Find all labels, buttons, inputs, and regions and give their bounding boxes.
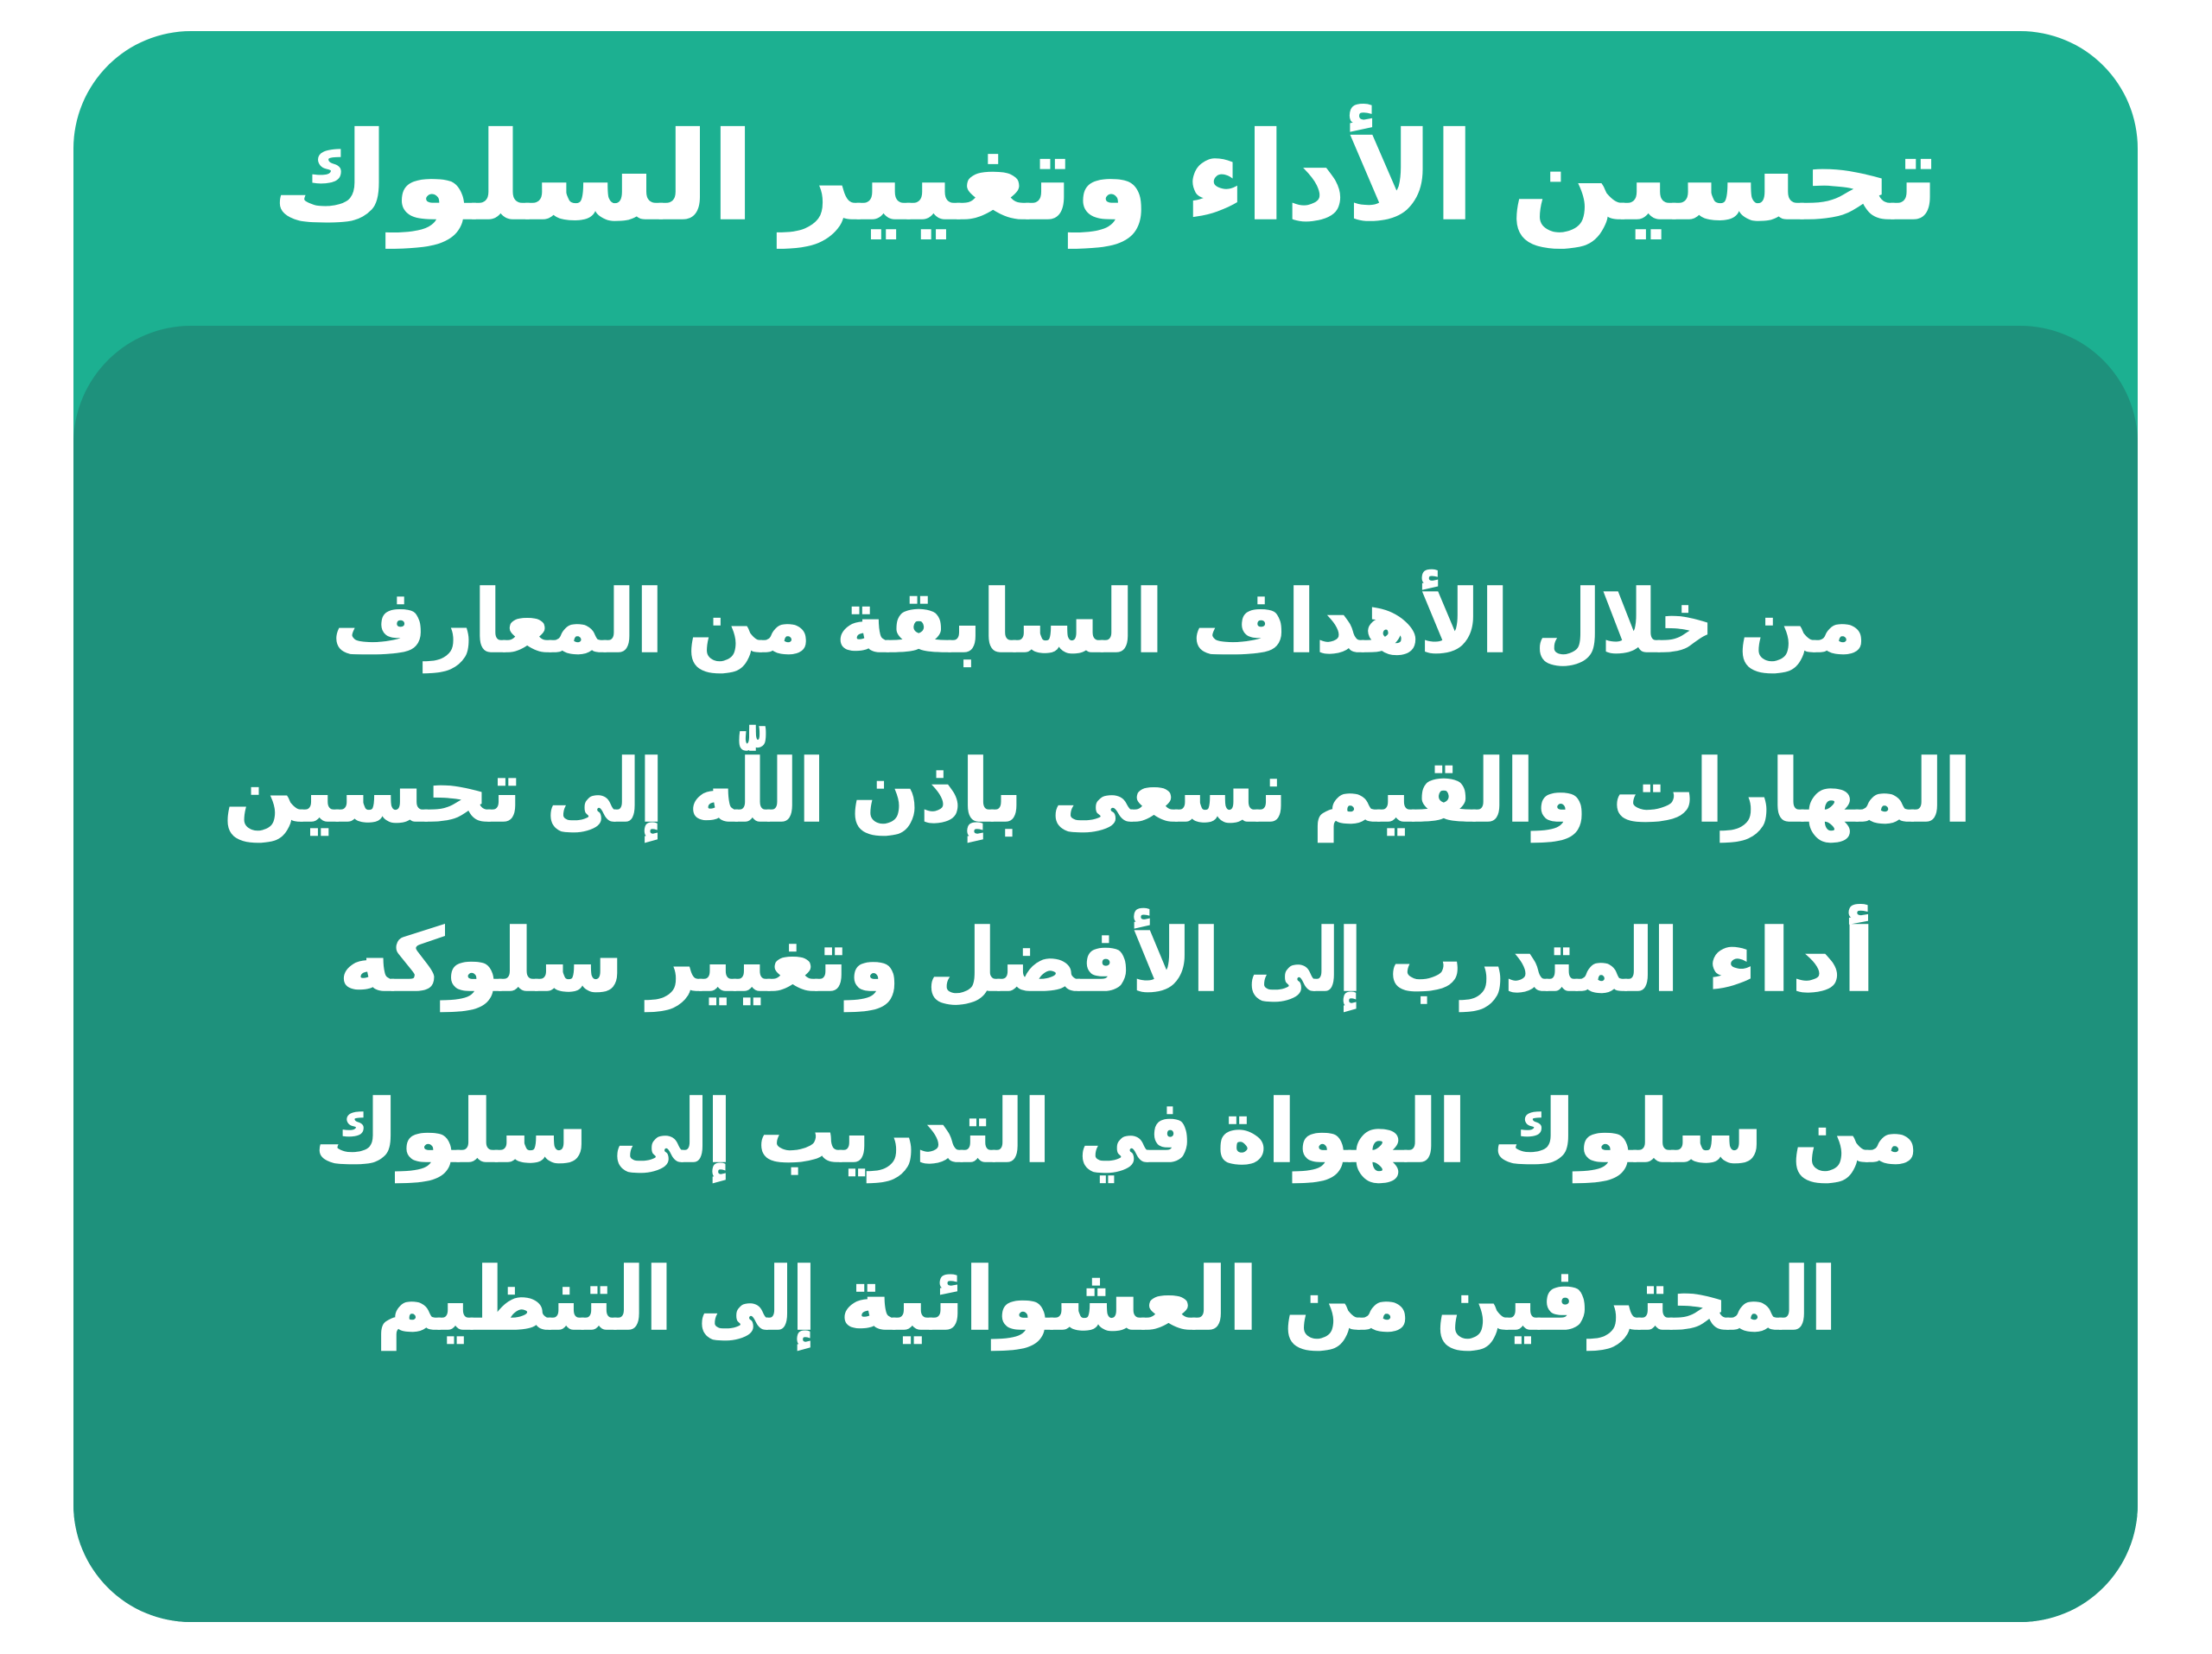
title [271, 105, 1940, 249]
body line 3: الأفضل [926, 908, 1220, 1011]
body line 2: اللّٰه [689, 725, 825, 842]
body line 3: وتغيير [645, 910, 900, 1012]
body line 4: من [1792, 1081, 1918, 1183]
body line 1: خلال [1535, 571, 1714, 672]
body line 3: سلوكه [339, 910, 624, 1012]
body line 2: المهارات [1612, 741, 1972, 843]
body line 2: إلى [547, 741, 663, 843]
body line 2 [223, 725, 1972, 843]
body line 3 [339, 904, 1876, 1012]
body line 4: في [1078, 1081, 1192, 1183]
body line 5: التنظيم [377, 1249, 672, 1351]
body line 4: إلى [613, 1081, 731, 1183]
body line 1: المعارف [332, 571, 664, 672]
title: وتغيير [777, 107, 1149, 249]
body line 5: المحترفين [1436, 1249, 1837, 1351]
body line 2: والقيم [1313, 741, 1587, 843]
body line 2: بإذن [850, 741, 1023, 843]
body line 4: سلوك [314, 1081, 588, 1183]
body line 3: أداء [1707, 904, 1876, 1011]
body line 1 [332, 569, 1866, 673]
body line 3: إلى [1248, 910, 1362, 1012]
title: تحسين [1510, 107, 1940, 248]
body line 4 [314, 1081, 1918, 1183]
title: الأداء [1185, 105, 1474, 248]
body line 1: من [687, 571, 811, 673]
body line 2: نسعى [1051, 741, 1287, 842]
body line 4: الهواة [1217, 1081, 1467, 1183]
body line 1: الأهداف [1192, 569, 1509, 672]
text block: body paragraph [223, 569, 1972, 1351]
body line 4: التدريب [757, 1081, 1051, 1182]
body line 3: المتدرب [1389, 910, 1678, 1011]
body line 4: سلوك [1492, 1081, 1764, 1183]
body line 1: من [1738, 571, 1866, 673]
body line 5: إلى [698, 1249, 816, 1351]
body line 5 [377, 1249, 1837, 1351]
body line 1: السابقة [836, 571, 1164, 672]
body line 2: تحسين [223, 741, 522, 843]
body line 5: العشوائية [840, 1249, 1258, 1351]
title: السلوك [271, 107, 755, 249]
panel: inner body card [73, 326, 2138, 1622]
body line 5: من [1284, 1249, 1410, 1351]
